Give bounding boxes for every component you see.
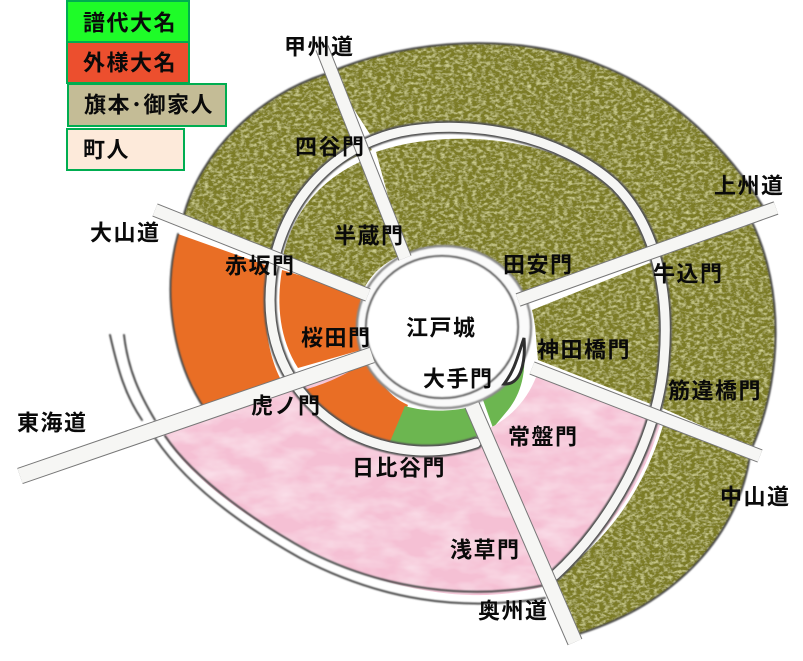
road: Koshu bbox=[322, 48, 405, 258]
label: 奥州道 bbox=[478, 598, 549, 624]
label: 東海道 bbox=[17, 410, 88, 436]
label: 大山道 bbox=[90, 220, 161, 246]
road: Oshu bbox=[472, 405, 575, 642]
castle moat and grounds bbox=[357, 246, 531, 408]
legend: hatamoto: 旗本･御家人 bbox=[84, 92, 214, 118]
label: 甲州道 bbox=[284, 34, 355, 60]
label: 四谷門 bbox=[295, 134, 366, 160]
label: 虎ノ門 bbox=[251, 394, 322, 418]
label: 筋違橋門 bbox=[668, 378, 762, 404]
legend: townspeople: 町人 bbox=[83, 138, 130, 162]
label: 牛込門 bbox=[653, 262, 724, 286]
legend: fudai bbox=[67, 1, 189, 42]
label: 中山道 bbox=[720, 484, 791, 510]
label: 常盤門 bbox=[508, 424, 579, 450]
label: 浅草門 bbox=[450, 538, 521, 562]
label: 田安門 bbox=[503, 252, 574, 278]
label: 大手門 bbox=[423, 366, 494, 392]
road: Oyama bbox=[155, 210, 368, 295]
legend bbox=[67, 1, 226, 170]
legend: fudai: 譜代大名 bbox=[83, 10, 177, 36]
regions: fudai green land bbox=[389, 352, 524, 447]
regions: tozama orange land bbox=[170, 234, 408, 446]
legend: tozama: 外様大名 bbox=[83, 50, 177, 76]
legend: tozama bbox=[67, 42, 189, 83]
road: Nakasendo bbox=[532, 368, 760, 456]
moat: middle spiral bbox=[270, 127, 665, 575]
road: Joshu bbox=[518, 208, 776, 300]
legend: townspeople bbox=[67, 129, 184, 170]
regions: townspeople pink land bbox=[162, 365, 660, 595]
label: 日比谷門 bbox=[352, 456, 446, 480]
label: 桜田門 bbox=[301, 326, 372, 350]
legend: hatamoto bbox=[68, 84, 226, 126]
regions: hatamoto olive land bbox=[183, 43, 776, 636]
moat: outer spiral lines bbox=[110, 43, 776, 636]
label: 上州道 bbox=[714, 174, 785, 198]
label: 江戸城 bbox=[406, 316, 477, 340]
road: Tokaido bbox=[20, 355, 372, 476]
label: 赤坂門 bbox=[225, 254, 296, 278]
label: 神田橋門 bbox=[537, 338, 631, 362]
label: 半蔵門 bbox=[334, 224, 405, 248]
